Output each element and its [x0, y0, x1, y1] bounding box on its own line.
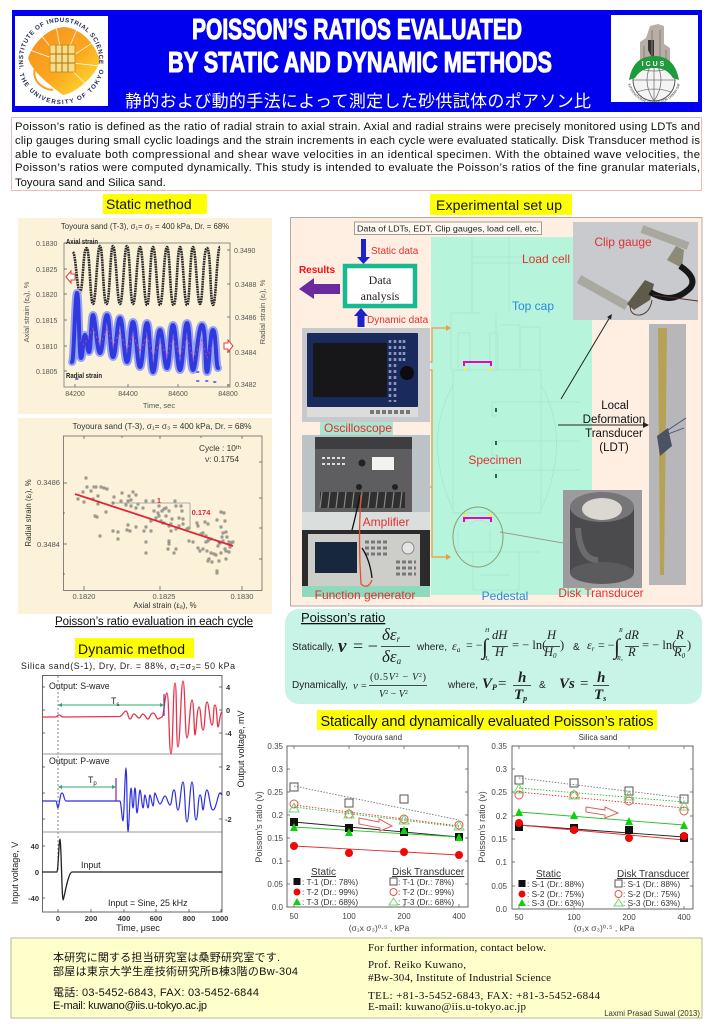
axis labels: Poisson’s ratio (ν) — [477, 791, 487, 863]
japanese contact: 本研究に関する担当研究室は桑野研究室です. — [53, 950, 280, 964]
static formulas: where, — [416, 642, 447, 653]
panel: strain vs time chart: 84600 — [168, 391, 188, 398]
legend: : T-3 (Dr.: 68%) — [398, 897, 454, 907]
hollow arrow — [586, 807, 618, 818]
dynamic formulas: P — [492, 683, 497, 692]
dynamic formulas: (0.5V — [370, 672, 395, 683]
panel: dynamic waveforms chart: 0 — [56, 914, 60, 923]
panel: radial vs axial strain scatter: 1 — [157, 496, 161, 505]
dynamic formulas: Dynamically, — [292, 680, 348, 691]
axis labels: 0.2 — [272, 811, 284, 820]
static formulas: a — [397, 656, 402, 666]
static formulas: Statically, — [292, 642, 334, 653]
dynamic formulas: Vs — [559, 676, 575, 692]
title: BY STATIC AND DYNAMIC METHODS — [168, 47, 552, 79]
static formulas: ε — [587, 638, 592, 652]
dynamic formulas: s — [602, 694, 606, 703]
dynamic formulas: h — [518, 670, 526, 686]
photo: function generator: Function generator — [315, 588, 415, 602]
panel: strain vs time chart: 0.1820 — [36, 292, 58, 299]
axis labels: 100 — [342, 912, 356, 921]
panel: dynamic waveforms chart: 400 — [118, 914, 130, 923]
axis labels: 0.35 — [267, 742, 284, 751]
photo: LDT — [649, 324, 686, 585]
dynamic formulas: h — [597, 670, 605, 686]
panel: strain vs time chart: Axial strain (εₐ), % — [22, 281, 31, 342]
panel: dynamic waveforms chart: Time, μsec — [116, 923, 160, 933]
panel: dynamic waveforms chart: 600 — [150, 914, 162, 923]
dynamic formulas: = — [361, 681, 367, 692]
axis labels: 0.1 — [272, 857, 284, 866]
static formulas: ) — [687, 638, 691, 652]
static formulas: ) — [560, 638, 564, 652]
chart: Toyoura sand: Toyoura sand — [354, 733, 402, 742]
static formulas: R₀ — [616, 656, 623, 662]
LDT label with arrows: (LDT) — [599, 442, 629, 454]
dynamic formulas: 2 — [385, 690, 388, 696]
panel: radial vs axial strain scatter: 0.3484 — [37, 540, 60, 549]
dynamic formulas: & — [539, 680, 546, 691]
english contact: E-mail: kuwano@iis.u-tokyo.ac.jp — [368, 1001, 526, 1013]
intro text box: clip gauges during small cyclic loadings and the strain increments in each cycle were evaluated statically. Disk Transducer method is — [15, 135, 700, 147]
P-wave trace — [42, 768, 222, 832]
chart subtitle: Silica sand(S-1), Dry, Dr. = 88%, σ₁=σ₃= 50 kPa — [21, 661, 235, 671]
panel: strain vs time chart: Axial strain — [66, 237, 98, 246]
static formulas: H — [544, 645, 553, 659]
static formulas: R — [618, 628, 623, 634]
orange connection arrows — [400, 325, 451, 560]
axis labels: 0.0 — [496, 905, 508, 914]
S-wave trace — [42, 681, 222, 754]
dynamic formulas: V — [399, 689, 407, 700]
panel: dynamic waveforms chart: -2 — [225, 815, 232, 824]
legend: Static — [536, 869, 561, 880]
panel: strain vs time chart: 0.1810 — [36, 344, 58, 351]
panel: dynamic waveforms chart: T — [88, 775, 93, 785]
dynamic formulas: − — [399, 672, 411, 683]
intro text box: Poisson’s ratio is defined as the ratio of radial strain to axial strain. Axial and radial strains were precisely monitored using LDTs and — [15, 121, 700, 133]
panel: dynamic waveforms chart: s — [116, 702, 119, 708]
panel: dynamic waveforms chart: Input = Sine, 25 kHz — [108, 898, 187, 908]
axis labels: 0.05 — [267, 880, 284, 889]
panel: strain vs time chart: Radial strain (εᵣ), % — [258, 279, 267, 344]
schematic labels: Load cell — [522, 252, 570, 266]
dynamic formulas: T — [514, 687, 523, 703]
caption: evaluation in each cycle: Poisson’s ratio evaluation in each cycle — [55, 616, 253, 628]
axis labels: 0.25 — [267, 788, 284, 797]
static formulas: H — [546, 628, 557, 642]
legend: : T-3 (Dr.: 68%) — [302, 897, 358, 907]
panel: strain vs time chart: Radial strain — [66, 371, 102, 380]
panel: strain vs time chart: 0.3486 — [235, 315, 257, 322]
panel: dynamic waveforms chart: Input — [81, 860, 101, 870]
static formulas: 0 — [553, 652, 557, 660]
logo: ICUS: INTERNATIONAL CENTER FOR URBAN SAFETY ENGINEERING — [628, 83, 680, 104]
legend: : S-2 (Dr.: 75%) — [623, 889, 680, 899]
legend: : T-2 (Dr.: 99%) — [302, 887, 358, 897]
chart: Toyoura sand — [254, 733, 468, 933]
dynamic formulas: ν — [353, 680, 358, 692]
panel: radial vs axial strain scatter: 0.1830 — [231, 592, 253, 601]
LDT label with arrows: Local — [601, 400, 629, 412]
logo: Institute of Industrial Science: · THE UNIVERSITY OF TOKYO — [19, 68, 104, 104]
photo: clip gauge: Clip gauge — [594, 235, 652, 249]
input trace — [42, 839, 222, 900]
axis labels: 0.1 — [496, 858, 508, 867]
english contact: TEL: +81-3-5452-6843, FAX: +81-3-5452-6844 — [368, 990, 600, 1002]
formula heading: Poisson’s ratio — [301, 610, 385, 625]
regression line — [75, 494, 233, 546]
axis labels — [477, 742, 691, 933]
dynamic formulas — [292, 670, 609, 703]
logo: ICUS: ICUS — [642, 61, 666, 68]
panel: strain vs time chart — [18, 218, 272, 414]
legend: Static — [311, 867, 336, 878]
panel: strain vs time chart: 0.3484 — [235, 350, 257, 357]
data flow labels: Dynamic data — [367, 315, 429, 326]
axis labels: Poisson’s ratio (ν) — [254, 791, 264, 863]
panel: radial vs axial strain scatter: Cycle : 10ᵗʰ — [199, 443, 241, 453]
data analysis box: Data — [369, 273, 392, 287]
apparatus schematic — [438, 237, 580, 590]
legend: : S-2 (Dr.: 75%) — [527, 889, 584, 899]
panel: strain vs time chart: 84800 — [218, 391, 238, 398]
panel: strain vs time chart: Toyoura sand (T-3), σ₁= σ₃ = 400 kPa, Dr. = 68% — [61, 222, 229, 231]
legend — [293, 867, 465, 907]
hollow arrows — [66, 271, 75, 283]
panel: Poisson's ratio formulas — [285, 609, 702, 704]
axis labels: 400 — [677, 913, 691, 922]
dynamic formulas: = — [580, 676, 588, 692]
static formulas: = − — [598, 638, 615, 652]
legend: Disk Transducer — [392, 867, 465, 878]
LDT label with arrows — [558, 314, 649, 454]
arrival time arrows — [58, 694, 164, 801]
japanese contact: 電話: 03-5452-6843, FAX: 03-5452-6844 — [53, 986, 259, 999]
contact panel — [11, 938, 702, 1018]
panel: strain vs time chart: 0.3482 — [235, 382, 257, 389]
panel: dynamic waveforms chart: 40 — [31, 842, 39, 851]
panel: radial vs axial strain scatter: 0.1820 — [73, 592, 95, 601]
static formulas: H — [494, 645, 505, 659]
static formulas: ∫ — [480, 634, 490, 660]
axis labels: 50 — [515, 913, 524, 922]
legend: : T-1 (Dr.: 78%) — [398, 877, 454, 887]
static formulas: = − — [466, 638, 483, 652]
static formulas — [292, 625, 691, 666]
japanese contact — [53, 950, 298, 1012]
axis labels: 0.25 — [491, 788, 508, 797]
static formulas: = − ln( — [512, 638, 546, 652]
legend: : S-1 (Dr.: 88%) — [527, 879, 584, 889]
static formulas: δε — [382, 625, 397, 644]
english contact: Prof. Reiko Kuwano, — [368, 959, 466, 971]
dynamic formulas: T — [594, 687, 603, 703]
static formulas: R — [675, 628, 684, 642]
panel: dynamic waveforms chart: 1000 — [212, 914, 228, 923]
dynamic data arrow — [354, 308, 368, 327]
static formulas: H₀ — [482, 656, 489, 662]
panel: dynamic waveforms chart: 800 — [183, 914, 195, 923]
photo: clip gauge — [573, 222, 698, 320]
panel: radial vs axial strain scatter — [18, 418, 272, 614]
LDT label with arrows: Deformation — [583, 414, 645, 426]
static formulas: δε — [382, 647, 397, 666]
panel: strain vs time chart: 0.1830 — [36, 241, 58, 248]
panel: dynamic waveforms chart: Input voltage, V — [10, 842, 20, 904]
axis labels: 0.15 — [491, 835, 508, 844]
panel: strain vs time chart: 0.3490 — [234, 248, 256, 255]
static formulas: r — [397, 634, 401, 644]
photo: oscilloscope — [302, 328, 430, 435]
dynamic formulas: V — [412, 672, 420, 683]
panel: dynamic waveforms chart: 2 — [226, 763, 230, 772]
heading: Experimental set up: Experimental set up — [436, 197, 562, 213]
results arrow — [299, 278, 340, 299]
chart: Silica sand: Silica sand — [579, 733, 617, 742]
axis labels: 0.2 — [496, 812, 508, 821]
panel: radial vs axial strain scatter: 0.3486 — [37, 478, 60, 487]
axis labels: 0.15 — [267, 834, 284, 843]
dynamic formulas: ) — [423, 672, 426, 683]
hollow arrow — [359, 818, 392, 831]
dynamic formulas: 2 — [396, 673, 399, 679]
panel: dynamic waveforms chart: -40 — [28, 894, 39, 903]
specimen sensors — [464, 362, 496, 522]
panel: dynamic waveforms chart: 0 — [226, 706, 230, 715]
data flow labels: Results — [299, 265, 335, 276]
japanese contact: 部屋は東京大学生産技術研究所B棟3階のBw-304 — [53, 964, 298, 978]
static formulas: H — [484, 628, 490, 634]
panel: dynamic waveforms chart: Output: S-wave — [49, 681, 110, 691]
LDT label with arrows: Transducer — [585, 428, 643, 440]
dynamic formulas: 2 — [405, 690, 408, 696]
panel: radial vs axial strain scatter: 0.174 — [192, 508, 211, 517]
title: POISSON’S RATIOS EVALUATED — [192, 14, 522, 46]
panel: radial vs axial strain scatter: Radial strain (εᵣ), % — [24, 479, 33, 547]
radial strain curve — [72, 293, 218, 382]
static data arrow — [357, 239, 370, 264]
header banner — [12, 10, 702, 112]
static formulas: ∫ — [612, 634, 622, 660]
panel: radial vs axial strain scatter: Toyoura sand (T-3), σ₁= σ₃ = 400 kPa, Dr. = 68% — [72, 421, 252, 431]
axis labels: 200 — [397, 912, 411, 921]
static formulas: ν — [338, 636, 347, 657]
axis labels — [254, 742, 466, 933]
intro text box: Toyoura sand and Silica sand. — [15, 177, 166, 189]
heading: Static method — [103, 194, 207, 214]
photo: amplifier — [302, 435, 430, 530]
photo: oscilloscope: Oscilloscope — [324, 421, 392, 435]
data markers — [289, 783, 464, 859]
schematic labels — [468, 252, 570, 603]
legend: : T-1 (Dr.: 78%) — [302, 877, 358, 887]
logo: ICUS — [611, 15, 698, 104]
static formulas: ε — [452, 639, 457, 653]
panel: strain vs time chart: 84200 — [65, 391, 85, 398]
dynamic formulas: = — [498, 676, 506, 692]
title — [168, 14, 552, 79]
panel: dynamic waveforms chart: -4 — [225, 729, 232, 738]
axis labels: (σ₁x σ₃)⁰·⁵ , kPa — [574, 923, 635, 933]
legend: : T-2 (Dr.: 99%) — [398, 887, 454, 897]
panel: dynamic waveforms chart: 200 — [85, 914, 97, 923]
panel: dynamic waveforms chart: Output voltage, mV — [236, 710, 246, 788]
axis labels: 200 — [622, 913, 636, 922]
panel: dynamic waveforms chart: 4 — [226, 683, 231, 692]
heading: Experimental set up — [430, 194, 572, 215]
static formulas: R — [627, 645, 636, 659]
static formulas: & — [573, 642, 580, 653]
dynamic formulas: V — [482, 676, 492, 692]
scatter points — [77, 477, 234, 574]
panel: dynamic waveforms chart: T — [111, 696, 116, 706]
data markers — [514, 776, 689, 842]
intro text box — [12, 118, 702, 190]
static formulas: dR — [625, 628, 639, 642]
zoom ellipse — [453, 507, 563, 567]
photo: disk transducer: Disk Transducer — [558, 586, 644, 600]
legend: Disk Transducer — [617, 869, 690, 880]
heading: statically and dynamically evaluated: Statically and dynamically evaluated Poisson’s ratios — [320, 714, 654, 730]
panel: experimental setup — [290, 218, 702, 606]
panel: dynamic waveforms chart: 0 — [35, 868, 39, 877]
panel: strain vs time chart: 0.1825 — [36, 267, 58, 274]
data source box: Data of LDTs, EDT, Clip gauges, load cell, etc. — [357, 224, 539, 234]
data flow labels — [299, 246, 429, 326]
credit: Laxmi Prasad Suwal (2013) — [604, 1009, 700, 1018]
dynamic formulas: where, — [447, 680, 478, 691]
schematic labels: Pedestal — [482, 589, 528, 603]
intro text box: able to evaluate both compressional and shear wave velocities in an identical specimen. With the obtained wave velocities, the — [15, 149, 700, 161]
panel: radial vs axial strain scatter: Axial strain (εₐ), % — [133, 601, 197, 610]
logo: Institute of Industrial Science — [15, 16, 108, 106]
static formulas: = − ln( — [642, 638, 676, 652]
data analysis box — [345, 266, 415, 306]
data flow labels: Static data — [371, 246, 419, 257]
axis labels: 100 — [567, 913, 581, 922]
axis labels: 0.05 — [491, 882, 508, 891]
axis labels: (σ₁x σ₃)⁰·⁵ , kPa — [349, 923, 410, 933]
japanese subtitle: 静的および動的手法によって測定した砂供試体のポアソン比 — [125, 92, 591, 111]
panel: dynamic waveforms chart: Output: P-wave — [49, 756, 110, 766]
panel: strain vs time chart: 0.3488 — [235, 282, 257, 289]
panel: dynamic waveforms chart: 0 — [226, 789, 230, 798]
english contact: #Bw-304, Institute of Industrial Science — [368, 972, 551, 984]
schematic labels: Specimen — [468, 453, 522, 467]
axis labels: 400 — [452, 912, 466, 921]
japanese contact: E-mail: kuwano@iis.u-tokyo.ac.jp — [53, 1000, 207, 1012]
axis labels: 0.3 — [272, 765, 284, 774]
axial strain curve — [73, 246, 220, 305]
axis labels: 0.0 — [272, 903, 284, 912]
panel: dynamic waveforms chart: p — [93, 781, 97, 787]
dynamic formulas: V — [379, 689, 387, 700]
static formulas: = − — [353, 636, 378, 656]
panel: strain vs time chart: 0.1805 — [36, 369, 58, 376]
legend: : S-1 (Dr.: 88%) — [623, 879, 680, 889]
static formulas: a — [457, 646, 461, 654]
static formulas: R — [674, 645, 682, 659]
static formulas: r — [592, 645, 595, 653]
axis labels: 50 — [290, 912, 299, 921]
panel: radial vs axial strain scatter: ν: 0.1754 — [205, 454, 240, 464]
dynamic formulas: − — [388, 689, 399, 700]
axis labels: 0.35 — [491, 742, 508, 751]
panel: radial vs axial strain scatter: 0.1825 — [153, 592, 175, 601]
photo: function generator — [302, 495, 430, 602]
dynamic formulas: 2 — [419, 673, 422, 679]
panel: dynamic waveforms chart — [10, 676, 246, 933]
intro text box: Poisson’s ratios were computed dynamically. This study is intended to evaluate the Poisson’s ratios of the fine granular materials, — [15, 162, 700, 174]
schematic labels: Top cap — [512, 299, 554, 313]
data analysis box: analysis — [361, 289, 400, 303]
logo: Institute of Industrial Science: INSTITUTE OF INDUSTRIAL SCIENCE — [18, 18, 104, 67]
photo: amplifier: Amplifier — [363, 515, 409, 529]
photo: disk transducer — [558, 490, 644, 600]
panel: strain vs time chart: 84400 — [118, 391, 138, 398]
static formulas: dH — [492, 628, 508, 642]
heading: Dynamic method: Dynamic method — [78, 641, 185, 657]
english contact: For further information, contact below. — [368, 942, 546, 954]
panel: strain vs time chart: Time, sec — [143, 401, 175, 410]
legend — [518, 869, 690, 908]
panel: strain vs time chart: 0.1815 — [36, 318, 58, 325]
legend: : S-3 (Dr.: 63%) — [527, 898, 584, 908]
dynamic formulas: p — [522, 694, 527, 703]
static formulas: 0 — [682, 652, 686, 660]
axis labels: 0.3 — [496, 765, 508, 774]
chart: Silica sand — [477, 733, 693, 933]
legend: : S-3 (Dr.: 63%) — [623, 898, 680, 908]
english contact — [368, 942, 600, 1013]
heading: Static method: Static method — [106, 196, 192, 212]
